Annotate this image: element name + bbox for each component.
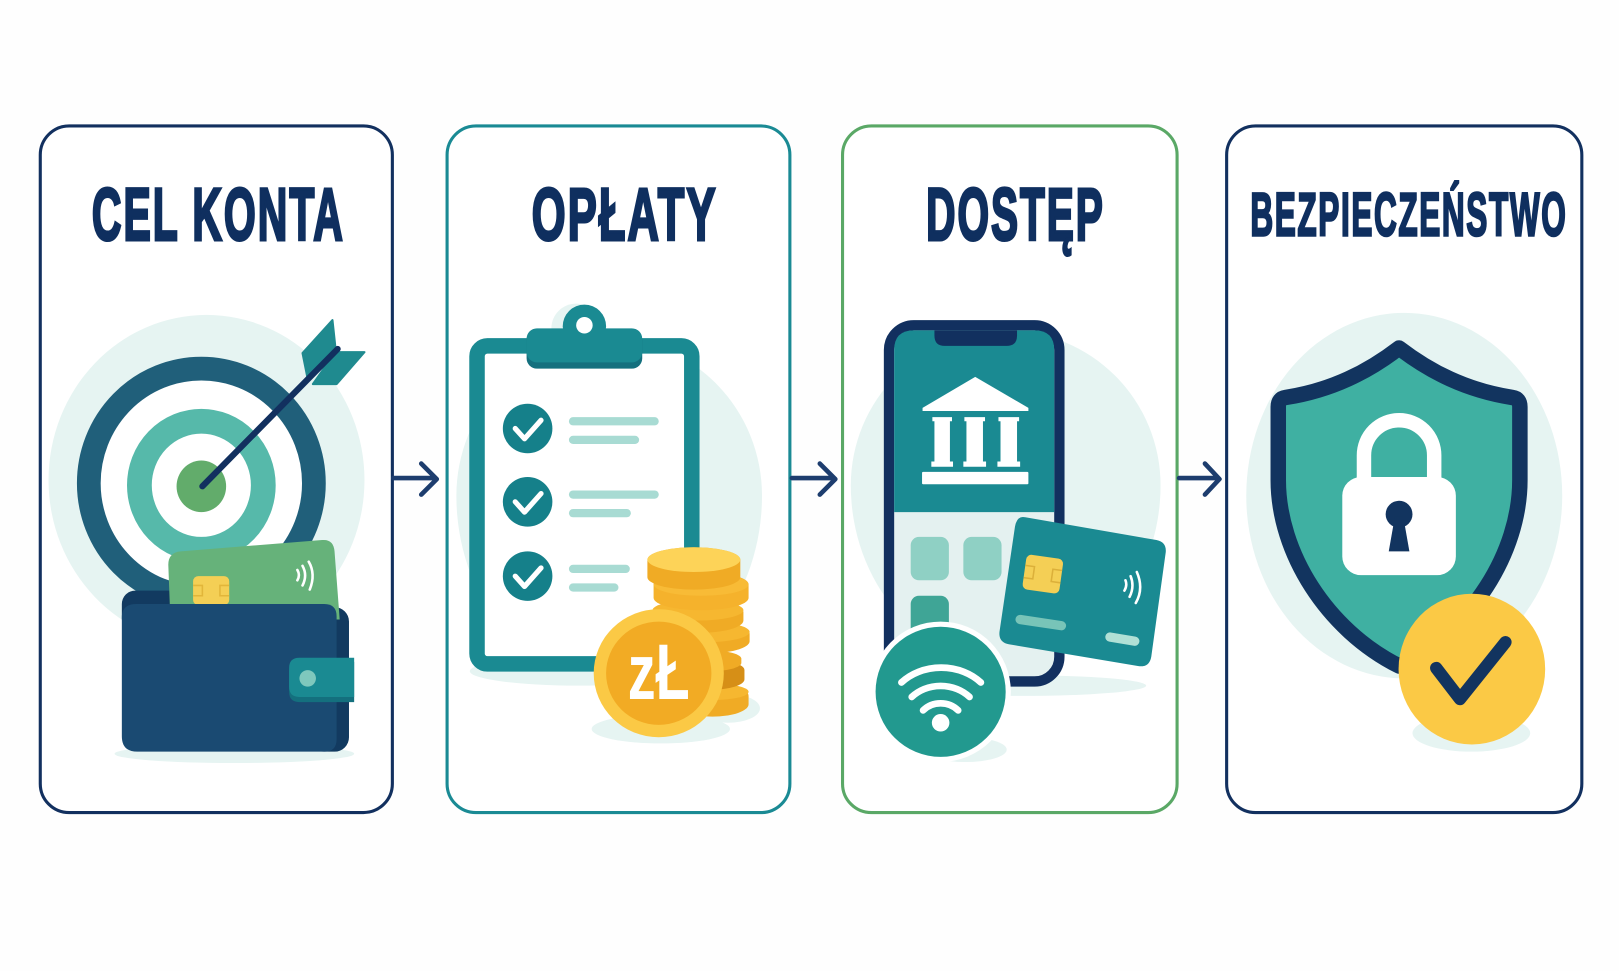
icon: target with arrow [49,315,364,645]
icon: złoty coin [594,609,724,737]
icon: wifi badge [870,622,1011,762]
icon: clipboard checklist [456,304,762,686]
arrow: dostęp to bezpieczeństwo [1179,464,1219,495]
heading: cel konta: CEL KONTA [92,173,345,256]
checklist item 3 [503,551,630,601]
icon: wallet with green card [115,540,354,763]
arrow: opłaty to dostęp [792,464,835,495]
icon: złoty coin: zŁ [628,628,690,716]
icon: bank card [999,517,1166,666]
checklist item 1 [503,404,659,453]
icon: bank building [922,377,1028,484]
heading: opłaty: OPŁATY [532,173,718,256]
panel: opłaty [447,126,790,813]
panel: bezpieczeństwo [1227,126,1582,813]
arrow: cel konta to opłaty [393,464,437,495]
icon: smartphone with bank app [851,325,1161,696]
icon: stack of coins [592,547,760,743]
checklist item 2 [503,477,659,527]
icon: padlock [1342,420,1456,575]
panel: cel konta [40,126,392,813]
panel: dostęp [843,126,1177,813]
icon: yellow check badge [1399,594,1545,752]
icon: shield with padlock [1246,313,1562,678]
heading: dostęp: DOSTĘP [926,173,1105,256]
